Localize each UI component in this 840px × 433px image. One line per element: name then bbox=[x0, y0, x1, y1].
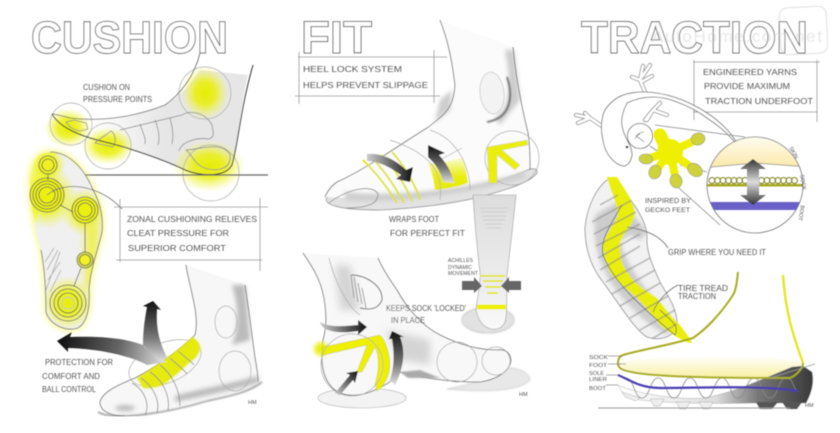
skin layer bbox=[711, 137, 799, 167]
watermark bbox=[652, 6, 828, 55]
cushion rings bbox=[30, 156, 98, 321]
box text: HELPS PREVENT SLIPPAGE bbox=[303, 80, 428, 90]
panel: yarn cross-section lens bbox=[700, 135, 810, 233]
signature: HM bbox=[519, 392, 528, 398]
ankle crescent bbox=[487, 77, 510, 122]
foot outline bbox=[100, 265, 258, 416]
foot shading bbox=[115, 285, 258, 411]
panel: insole with zonal cushioning bbox=[17, 147, 122, 330]
toe pads bbox=[639, 131, 706, 189]
studs bbox=[756, 402, 802, 409]
ground line bbox=[58, 174, 268, 176]
labels: boot layers: FOOT bbox=[589, 363, 608, 369]
yellow tread bbox=[603, 177, 692, 343]
labels: boot layers: BOOT bbox=[589, 386, 607, 392]
panel: cushion lower foot bbox=[98, 265, 262, 416]
double arrow bbox=[740, 159, 766, 205]
gecko limbs bbox=[576, 65, 667, 128]
heel circle bbox=[485, 131, 539, 185]
arrow: up bbox=[389, 331, 404, 385]
insole glow bbox=[30, 152, 102, 329]
box text: ZONAL CUSHIONING RELIEVES bbox=[127, 214, 257, 224]
panel: achilles rear view bbox=[462, 195, 521, 333]
panel: cushion side foot with pressure points bbox=[44, 53, 268, 201]
title: CUSHION: CUSHION bbox=[31, 12, 228, 63]
foot outline bbox=[52, 53, 253, 175]
foot outline bbox=[325, 20, 455, 197]
sock outline bbox=[618, 272, 803, 378]
text: cushion on pressure points bbox=[83, 82, 152, 104]
text: cushion on pressure points: PRESSURE POINTS bbox=[83, 94, 152, 104]
insole body bbox=[30, 152, 102, 330]
foot palm bbox=[657, 139, 683, 165]
foot shading bbox=[335, 265, 430, 365]
text: inspired by gecko: INSPIRED BY bbox=[645, 198, 691, 205]
text: wraps foot: FOR PERFECT FIT bbox=[390, 228, 465, 238]
text: achilles: DYNAMIC bbox=[448, 265, 472, 271]
text: keeps sock locked: KEEPS SOCK 'LOCKED' bbox=[386, 303, 466, 313]
sole liner bbox=[618, 375, 798, 391]
text: achilles: ACHILLES bbox=[448, 258, 473, 264]
ankle oval bbox=[478, 71, 506, 115]
heel shadow bbox=[462, 307, 514, 333]
small foot bbox=[635, 132, 644, 142]
zoom leaders bbox=[650, 125, 745, 225]
text: protection bbox=[42, 357, 113, 394]
text: inspired by gecko: GECKO FEET bbox=[645, 207, 690, 214]
bones bbox=[66, 112, 230, 170]
text box: zonal cushioning bbox=[114, 198, 268, 271]
title: TRACTION: TRACTION bbox=[581, 12, 808, 63]
arrow: up bbox=[143, 301, 167, 362]
sock rings bbox=[480, 208, 508, 228]
labels: boot layers: SOLE bbox=[589, 371, 604, 377]
boot wedge bbox=[618, 366, 813, 403]
arrow: squeeze left bbox=[501, 277, 521, 293]
panel: fit upper foot bbox=[325, 20, 539, 210]
text: wraps foot bbox=[389, 214, 465, 238]
ankle bone bbox=[351, 275, 382, 309]
text: protection: PROTECTION FOR bbox=[45, 357, 113, 367]
foot outline bbox=[303, 253, 511, 395]
panel: gecko bbox=[576, 65, 745, 225]
yellow gecko foot bbox=[646, 135, 696, 180]
text box: heel lock bbox=[295, 50, 447, 104]
leg bbox=[473, 195, 516, 329]
foot bottom shadow bbox=[98, 382, 262, 416]
text: tire tread: TIRE TREAD bbox=[678, 283, 728, 293]
layer labels: SKIN bbox=[787, 146, 799, 160]
foot shading bbox=[345, 50, 525, 201]
yarn loops bbox=[709, 178, 798, 184]
yellow midfoot band bbox=[428, 157, 468, 190]
sock highlight bbox=[783, 275, 803, 363]
box text: HEEL LOCK SYSTEM bbox=[303, 64, 402, 74]
label leaders bbox=[606, 356, 626, 385]
purple layer bbox=[700, 202, 810, 210]
text: grip: GRIP WHERE YOU NEED IT bbox=[668, 247, 766, 257]
ankle bone ovals bbox=[122, 306, 251, 396]
center line bbox=[602, 205, 676, 335]
signature: HM bbox=[248, 400, 257, 406]
foot base bbox=[325, 20, 530, 198]
box text: CLEAT PRESSURE FOR bbox=[127, 228, 229, 238]
text: keeps sock locked bbox=[386, 303, 466, 325]
hatch shadow under arch bbox=[400, 370, 440, 378]
skin line bbox=[700, 163, 810, 168]
lens ring bbox=[707, 137, 803, 233]
gecko eye bbox=[626, 146, 628, 148]
text: wraps foot: WRAPS FOOT bbox=[389, 214, 439, 224]
foot fill bbox=[618, 356, 802, 378]
box text: PROVIDE MAXIMUM bbox=[704, 81, 790, 91]
layer labels: BOOT bbox=[796, 205, 805, 222]
lace stripes bbox=[132, 351, 194, 415]
box text: ENGINEERED YARNS bbox=[703, 67, 797, 77]
toe ground shadow bbox=[447, 368, 530, 391]
yarn band bbox=[707, 184, 803, 186]
inner leg line bbox=[329, 258, 360, 315]
text: achilles: MOVEMENT bbox=[448, 271, 479, 277]
ankle hatch bbox=[351, 275, 366, 308]
panel: sole with tread bbox=[585, 177, 692, 343]
arrow: diagonal bbox=[335, 371, 358, 395]
toe ovals bbox=[437, 342, 510, 382]
yellow chevron bbox=[487, 140, 528, 183]
arrow: squeeze right bbox=[462, 277, 482, 293]
panel: boot cross-section bbox=[598, 272, 815, 409]
box text bbox=[303, 64, 428, 90]
text: protection: BALL CONTROL bbox=[42, 384, 96, 394]
text: achilles bbox=[448, 258, 479, 277]
box text bbox=[703, 67, 813, 106]
sole plate bbox=[326, 169, 537, 210]
text: tire tread bbox=[678, 283, 728, 301]
box text: SUPERIOR COMFORT bbox=[128, 243, 226, 253]
yellow bands bbox=[480, 276, 505, 293]
text: protection: COMFORT AND bbox=[42, 371, 100, 381]
arrow: up bbox=[428, 145, 454, 183]
text: cushion on pressure points: CUSHION ON bbox=[83, 82, 130, 92]
arrow: wrap down bbox=[367, 154, 413, 182]
text box: engineered yarns bbox=[693, 60, 820, 122]
toe outline bbox=[329, 189, 378, 208]
arrow: wrap right bbox=[320, 320, 367, 335]
hatch shading bbox=[45, 248, 61, 292]
arrow: left protection bbox=[57, 332, 167, 365]
labels: boot layers: SOCK bbox=[589, 355, 608, 361]
labels: boot layers: LINER bbox=[589, 377, 607, 383]
midfoot arcs bbox=[390, 130, 470, 200]
ground line bbox=[598, 407, 790, 409]
title: FIT: FIT bbox=[301, 12, 372, 63]
gecko body bbox=[602, 92, 745, 166]
sole body bbox=[585, 178, 677, 339]
layer labels: SOCK bbox=[798, 174, 807, 191]
heel ground shadow bbox=[318, 388, 406, 408]
leader line bbox=[47, 187, 122, 209]
text: inspired by gecko bbox=[645, 198, 691, 214]
yarn wave bbox=[626, 378, 798, 398]
watermark: AutoHome.com.net bbox=[652, 27, 822, 46]
tread shadow bbox=[594, 200, 672, 335]
yellow lace strip bbox=[137, 337, 200, 388]
foot shading bbox=[52, 70, 248, 175]
yellow heel glow bbox=[311, 339, 331, 359]
layer labels bbox=[787, 146, 807, 222]
foot base bbox=[100, 265, 262, 416]
box text bbox=[127, 214, 257, 253]
insole outline bbox=[41, 152, 102, 329]
signature: HM bbox=[805, 403, 814, 409]
zoom circle bbox=[628, 124, 652, 148]
panel: fit heel foot bbox=[303, 253, 530, 408]
leaders bbox=[627, 227, 668, 248]
box text: TRACTION UNDERFOOT bbox=[705, 96, 813, 106]
text: keeps sock locked: IN PLACE bbox=[391, 315, 425, 325]
heel circle bbox=[321, 334, 383, 396]
tread hatching bbox=[592, 195, 680, 340]
pressure point circles bbox=[50, 67, 239, 201]
text: tire tread: TRACTION bbox=[678, 291, 716, 301]
yellow heel chevron bbox=[323, 335, 390, 391]
sole top line bbox=[770, 364, 815, 378]
labels: boot layers bbox=[589, 355, 626, 392]
glow: pressure points bbox=[44, 66, 245, 192]
toe stripes bbox=[363, 152, 420, 203]
